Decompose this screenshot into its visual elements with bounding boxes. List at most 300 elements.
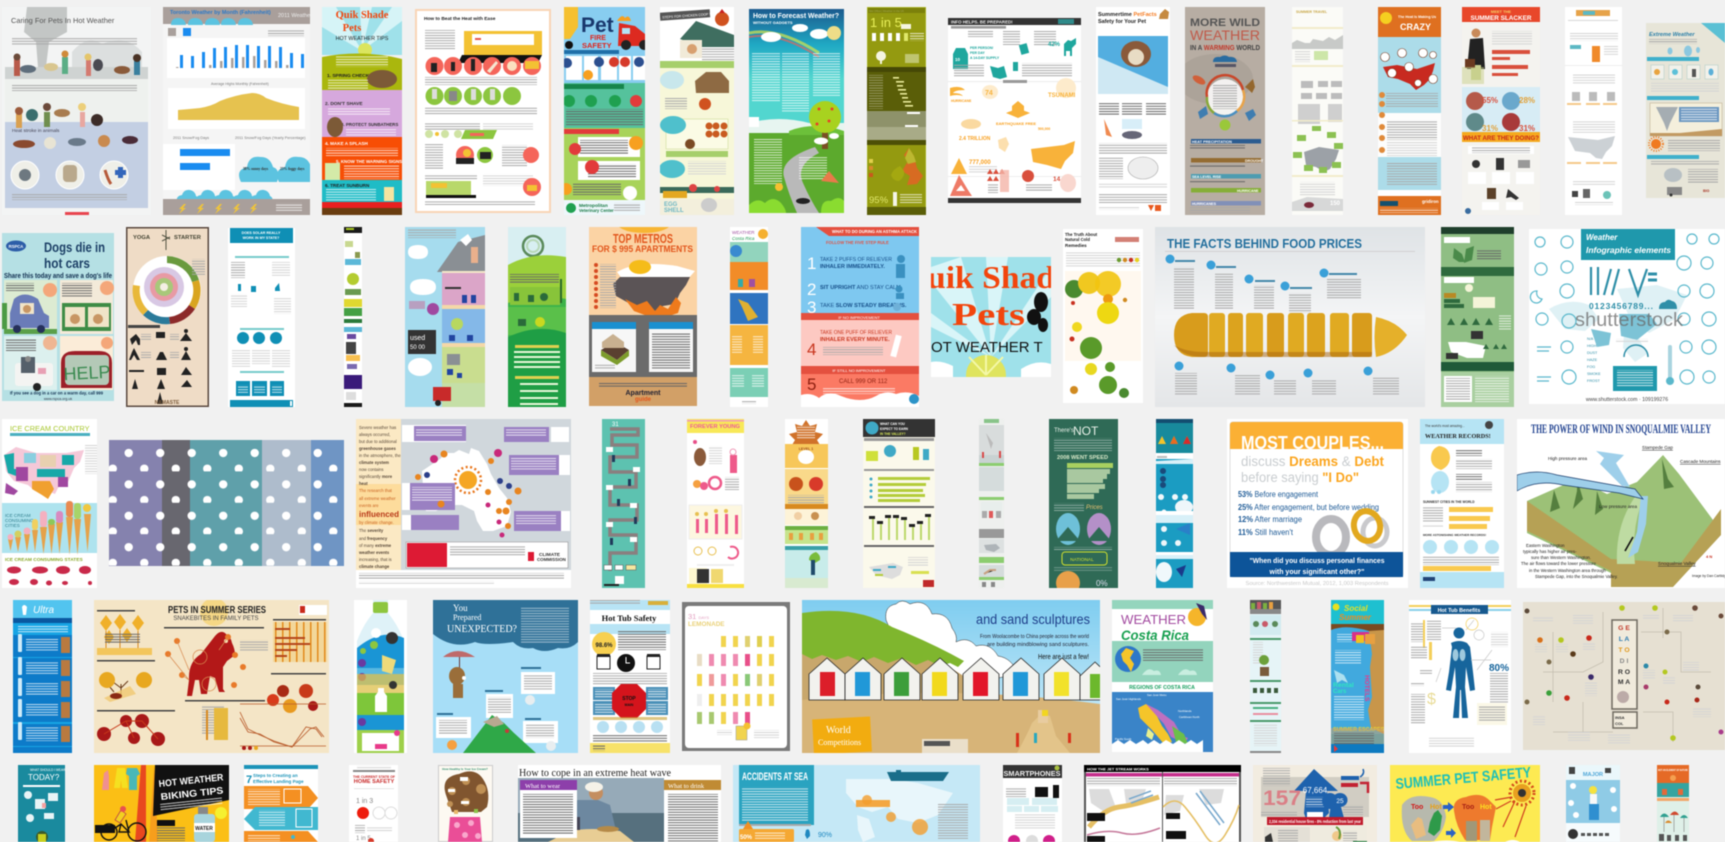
sun xyxy=(1510,781,1534,805)
central title panel xyxy=(1612,620,1637,709)
tile: Toronto Weather by Month: Average Highs Monthly (Fahrenheit) xyxy=(211,82,269,86)
title box xyxy=(1431,605,1488,614)
central title panel: G E xyxy=(1618,625,1630,632)
title: The Truth About xyxy=(1065,232,1098,237)
tile: Ice Cream Country xyxy=(2,419,98,588)
title: Summertime PetFacts xyxy=(1098,12,1157,18)
tile: How to Beat the Heat with Ease xyxy=(414,8,552,214)
title: How Healthy Is Your Ice Cream? xyxy=(442,767,488,771)
tile: Asthma attack five step rule: CALL 999 OR 112 xyxy=(839,379,888,385)
gelato icons xyxy=(1524,605,1724,741)
yellow sign: World xyxy=(826,725,851,736)
tile: Home Safety: HOME SAFETY xyxy=(354,779,394,785)
word list: N/A xyxy=(1587,337,1594,341)
tile: polka dot colour stripes xyxy=(108,439,345,567)
text column: influenced xyxy=(359,510,399,519)
tile: The Power of Wind in Snoqualmie Valley: 4 N xyxy=(1706,554,1712,559)
title: Toronto Weather by Month (Fahrenheit) xyxy=(170,10,271,16)
labels: High pressure area xyxy=(1548,456,1588,461)
tile: Yoga Starter: STARTER xyxy=(174,235,202,241)
weather icons xyxy=(1530,234,1719,384)
title: WEATHER xyxy=(1121,612,1186,627)
tile: dark green chalkboard xyxy=(1048,418,1119,589)
tile: Quik Shade Pets hot weather tips: 5. KNOW THE WARNING SIGNS xyxy=(336,159,402,164)
title: MEET THE xyxy=(1491,9,1511,14)
tile: Summer Travel: 150 xyxy=(1330,201,1341,207)
green hill xyxy=(802,611,964,667)
central title panel: D I xyxy=(1620,658,1628,665)
1 in 5 figure xyxy=(870,15,924,41)
tile: Quik Shade Pets hot weather tips: Pets xyxy=(343,23,361,34)
tile: Toronto Weather by Month: 2011 Snow/Fog Days xyxy=(173,136,209,140)
right globe chart xyxy=(1163,789,1239,842)
tile: white with pink and yellow stats xyxy=(686,418,745,589)
woman in suit xyxy=(1465,28,1485,80)
title: Prepared xyxy=(453,613,481,622)
tile: Weather Infographic elements (shutterstock) xyxy=(1529,228,1725,404)
tile: Natural Cold Remedies: Natural Cold xyxy=(1065,237,1090,242)
word list: HIGH xyxy=(1587,344,1597,348)
title: YOGA xyxy=(133,235,151,241)
hanging clothes xyxy=(102,768,140,790)
tile: teal road game xyxy=(601,418,646,589)
orange hazards section: 74 xyxy=(985,90,993,97)
three blue boxes xyxy=(236,381,284,396)
tile: Weather Records: WEATHER RECORDS! xyxy=(1425,433,1491,440)
tile: Info helps be prepared xyxy=(947,17,1082,204)
tile: sun top health stats: LEVEL 1 xyxy=(799,447,813,451)
footer word: NAMASTE xyxy=(155,400,180,406)
tile: Dogs die in hot cars: www.rspca.org.uk xyxy=(44,397,72,401)
tile: Top Metros for Apartments: guide xyxy=(635,397,652,403)
icon: sun xyxy=(1649,137,1663,151)
tile: Are You Prepared for the Unexpected xyxy=(433,600,578,753)
tile: Weather Records xyxy=(1420,419,1504,588)
teal preparedness section: A 14-DAY SUPPLY xyxy=(970,56,1000,60)
orange stat box xyxy=(739,821,794,842)
teal arrow step xyxy=(244,807,318,830)
stop octagon xyxy=(612,684,646,718)
navy callout: with your significant other?" xyxy=(1269,567,1365,576)
human body figure xyxy=(1446,628,1475,718)
area chart xyxy=(168,88,305,129)
tile: How to Forecast Weather: WITHOUT GADGETS xyxy=(753,20,793,25)
teal preparedness section: 42% xyxy=(1048,42,1061,48)
tile: More Wild Weather in a Warming World: IN A WARMING WORLD xyxy=(1190,43,1260,52)
icon: black paw xyxy=(1027,292,1048,332)
orange circles xyxy=(267,684,318,713)
steps: TAKE SLOW STEADY BREATHS. xyxy=(820,303,907,309)
orange hazards section xyxy=(950,78,1076,174)
tile: Hot Tub Benefits xyxy=(1409,600,1511,753)
sea photo xyxy=(518,778,664,842)
tile: Extreme Weather xyxy=(1646,22,1725,198)
explanation text: sure than Western Washington. xyxy=(1531,555,1591,560)
panel: too hot gray: Hot xyxy=(1430,804,1442,811)
watermark: shutterstock xyxy=(1575,310,1684,331)
statistic circles: 55% xyxy=(1482,96,1498,105)
steps xyxy=(807,254,907,317)
tile: Accidents at Sea xyxy=(733,765,980,842)
US map with icons xyxy=(1380,48,1438,90)
red callout xyxy=(406,542,568,568)
text column: events are xyxy=(359,503,379,508)
explanation text: typically has higher air pres- xyxy=(1523,549,1577,554)
tile: Asthma attack five step rule: IF NO IMPROVEMENT xyxy=(838,315,880,320)
tile: 7 Steps to Creating an Effective Landing Page: Steps to Creating an xyxy=(253,773,298,778)
tile: Ice Cream Country: CONSUMING xyxy=(5,518,34,523)
footer credit: www.shutterstock.com · 109199276 xyxy=(1586,397,1668,403)
steps: 3 xyxy=(807,298,816,317)
diamond signs xyxy=(100,614,144,644)
text column: all extreme weather xyxy=(359,496,396,501)
tree diagram xyxy=(99,672,152,702)
terrain block xyxy=(1527,455,1721,587)
teal preparedness section xyxy=(953,30,1076,79)
tile: Dogs die in hot cars: hot cars xyxy=(44,255,90,271)
logo: Apartment xyxy=(625,390,661,397)
title: HOT WEATHER xyxy=(158,772,224,790)
title: Social xyxy=(1344,604,1368,613)
text column: The severity xyxy=(359,528,384,533)
teal preparedness section: PER DAY xyxy=(970,51,985,55)
tile: What can you expect dark header xyxy=(862,418,936,588)
tile: Weather Costa Rica: Northlands xyxy=(1178,709,1192,713)
panel: too hot gray: Too xyxy=(1411,804,1423,811)
purple callouts xyxy=(402,425,570,531)
tornado scene xyxy=(1650,103,1722,136)
sunniest bars xyxy=(1423,506,1493,529)
numerals: 0123456789... xyxy=(1589,301,1654,311)
tile: Quik Shade Pets crop xyxy=(927,256,1055,378)
tile: light blue multi panel: 50 00 xyxy=(410,345,426,351)
central title panel: T O xyxy=(1618,647,1630,654)
tile: Social Summer: SUMMER ESCAPES xyxy=(1333,727,1385,733)
panel: house card xyxy=(592,322,636,372)
tile: sun top health stats xyxy=(784,419,829,588)
tile: More Wild Weather in a Warming World: HURRICANE xyxy=(1237,189,1259,193)
subtitle: OT WEATHER T xyxy=(931,339,1043,356)
explanation text: in the Western Washington area through xyxy=(1529,568,1607,573)
tile: 7 Steps to Creating an Effective Landing Page: Effective Landing Page xyxy=(253,779,304,784)
tile: Toronto Weather by Month: 2011 Weather xyxy=(278,13,312,19)
tile: Asthma attack five step rule xyxy=(800,226,920,407)
orange header: MOST COUPLES... xyxy=(1241,433,1384,453)
central title panel: R O xyxy=(1618,669,1630,676)
dark storm cloud xyxy=(433,600,578,651)
white clouds xyxy=(886,601,1018,694)
title: HOW THE JET STREAM WORKS xyxy=(1087,766,1149,772)
tile: chicken coop guide xyxy=(659,7,735,215)
heading: WHAT ARE THEY DOING? xyxy=(1463,136,1539,142)
heading: REGIONS OF COSTA RICA xyxy=(1129,685,1195,691)
title box xyxy=(1581,229,1675,260)
cyclist xyxy=(101,820,146,841)
text column: climate system xyxy=(359,460,389,465)
text column: significantly more xyxy=(359,474,393,479)
title: SUMMER TRAVEL xyxy=(1296,10,1328,14)
world map xyxy=(846,779,953,842)
explanation text xyxy=(1521,543,1618,579)
cloud: sunny days: 38% sunny days xyxy=(243,167,269,171)
labels: Snoqualmie Valley xyxy=(1658,561,1696,566)
horizontal bars xyxy=(180,149,230,170)
tile: Pet Fire Safety: FIRE xyxy=(590,35,606,42)
tile: Smartphones xyxy=(1003,765,1062,842)
water bottle: WATER xyxy=(195,826,213,832)
cloud: sunny days xyxy=(239,157,278,182)
badge xyxy=(1188,603,1207,626)
statistics list: 11% Still haven't xyxy=(1238,528,1294,537)
title xyxy=(447,603,517,635)
thermometer panel xyxy=(458,31,542,63)
yellow sign: Competitions xyxy=(818,738,861,747)
large lemonade cup xyxy=(736,722,750,740)
orange hazards section: 777,000 xyxy=(969,160,991,166)
tile: Quik Shade Pets hot weather tips: 3. PROTECT SUNBATHERS xyxy=(341,122,398,127)
orange arrow step xyxy=(244,786,318,809)
heading: ICE CREAM CONSUMING STATES xyxy=(5,557,83,563)
ranking list xyxy=(594,263,598,309)
tan hillside xyxy=(802,640,992,700)
beach huts xyxy=(809,658,1110,700)
panel: too hot orange xyxy=(1454,795,1496,841)
title: ICE CREAM COUNTRY xyxy=(10,424,90,433)
title: Caring For Pets In Hot Weather xyxy=(11,16,115,25)
bar chart xyxy=(167,38,305,78)
text column: Severe weather has xyxy=(359,425,396,430)
tile: More Wild Weather in a Warming World: HURRICANES xyxy=(1192,202,1217,206)
wind arrow xyxy=(1517,472,1643,499)
tile: Hot Tub Benefits: $ xyxy=(1427,691,1436,708)
yoga poses xyxy=(129,329,192,404)
big number: 157 xyxy=(1263,787,1301,810)
tile: More Wild Weather in a Warming World: SEA LEVEL RISE xyxy=(1192,175,1222,179)
word list: DUST xyxy=(1587,351,1598,355)
panel: tips card xyxy=(649,322,693,372)
title: Ultra xyxy=(33,605,55,616)
text column: climate change xyxy=(359,564,390,569)
tile: Hot Weather Biking Tips xyxy=(94,765,229,842)
title: 7 xyxy=(246,774,252,786)
word list: FROST xyxy=(1587,379,1601,383)
tile: How the Jet Stream Works xyxy=(1084,765,1241,842)
title box: Weather xyxy=(1586,233,1618,242)
tile: Quik Shade Pets hot weather tips: 4. MAKE A SPLASH xyxy=(325,141,368,146)
tile: Does solar really work in my state xyxy=(228,227,295,408)
text column: but due to additional xyxy=(359,439,397,444)
text column: heat xyxy=(359,481,368,486)
sun xyxy=(966,355,1006,395)
tile: Weather Costa Rica long xyxy=(729,227,769,407)
orange hazards section: 2.4 TRILLION xyxy=(959,136,991,142)
title: SMARTPHONES xyxy=(1004,769,1061,778)
tile: Weather Costa Rica: San José Metro xyxy=(1147,693,1167,697)
title: Extreme Weather xyxy=(1649,32,1695,38)
tile: Accidents at Sea: 90% xyxy=(818,832,832,839)
panel: what to wear: What to wear xyxy=(525,783,561,790)
tile: Dogs die in hot cars xyxy=(1,232,115,402)
word list: HAZE xyxy=(1587,358,1598,362)
wedding rings xyxy=(1316,508,1387,555)
horizontal bar chart xyxy=(273,622,327,662)
statistic circles xyxy=(1466,92,1535,133)
ship xyxy=(887,770,949,781)
text column: increasing, that is xyxy=(359,557,392,562)
title: THE FACTS BEHIND FOOD PRICES xyxy=(1167,236,1362,251)
explanation text: The air flows toward the lower pressure xyxy=(1521,561,1597,566)
panel: mountain xyxy=(437,234,485,272)
title: How to Forecast Weather? xyxy=(753,11,839,20)
title: The world's most amazing... xyxy=(1425,424,1465,428)
tile: dark green chalkboard: 0% xyxy=(1096,579,1108,588)
tile: Pet Fire Safety xyxy=(563,6,646,214)
title box: Infographic elements xyxy=(1586,246,1672,255)
tile: Summer Pet Safety xyxy=(1390,764,1540,842)
panel: too hot gray xyxy=(1402,796,1446,841)
labels xyxy=(1548,445,1725,578)
text columns lower xyxy=(1174,362,1399,396)
text column: in the atmosphere, the xyxy=(359,453,401,458)
tile: More Wild Weather in a Warming World: WEATHER xyxy=(1190,28,1260,43)
tag labels xyxy=(1341,769,1368,793)
tile: blue teal safety xyxy=(1155,418,1194,589)
labels: Stampede Gap xyxy=(1642,445,1673,450)
tile: More Wild Weather in a Warming World xyxy=(1184,6,1266,216)
tile: bottle shaped infographic xyxy=(354,600,407,753)
tile: Gelato di Roma: INSA xyxy=(1615,715,1625,720)
steps: SIT UPRIGHT AND STAY CALM. xyxy=(820,285,903,291)
tile: Caring For Pets In Hot Weather xyxy=(4,6,148,216)
fire truck xyxy=(617,16,649,50)
tile: narrow strip infographic xyxy=(343,226,363,408)
tile: Major Life skills light blue xyxy=(1566,765,1620,842)
text column: greenhouse gases xyxy=(359,446,396,451)
RSPCA logo: RSPCA xyxy=(9,244,23,249)
orange header xyxy=(1230,422,1403,453)
panel: what to drink xyxy=(664,780,721,842)
fried egg US map xyxy=(613,260,695,317)
tile: What can you expect dark header: EXPECT TO EARN xyxy=(880,427,909,431)
text column: always occurred, xyxy=(359,432,390,437)
tile: Weather Records: MORE ASTONISHING WEATHER RECORDS! xyxy=(1423,533,1486,537)
title: WHAT SHOULD I WEAR xyxy=(30,768,66,772)
tile: The Power of Wind in Snoqualmie Valley xyxy=(1517,419,1725,588)
tile: thin plant infographic xyxy=(1250,600,1281,753)
tile: More Wild Weather in a Warming World: HEAT PRECIPITATION xyxy=(1192,140,1232,144)
heading: ICE CREAM xyxy=(5,513,31,518)
tile: chicken coop guide: SHELL xyxy=(664,208,684,214)
US map xyxy=(4,447,84,499)
source: Source: Northwestern Mutual, 2012, 1,003 Respondents xyxy=(1246,581,1389,587)
tile: Weather Costa Rica long: Costa Rica xyxy=(732,236,755,241)
text columns upper xyxy=(1166,254,1361,313)
labels: Cascade Mountains xyxy=(1680,459,1721,464)
tile: beach huts and sand sculptures xyxy=(802,600,1110,754)
panel: blue car xyxy=(2,280,57,334)
tile: Home Safety xyxy=(349,765,398,842)
footer text: If you see a dog in a car on a warm day, call 999 xyxy=(10,390,103,396)
yellow statistic: 98.6% xyxy=(595,643,613,649)
tile: More Wild Weather in a Warming World: DROUGHT xyxy=(1245,159,1264,163)
tile: How to Forecast Weather xyxy=(748,8,845,214)
tile: Ice Cream Country: CITIES xyxy=(5,523,20,528)
tile: Weather Records: SUNNIEST CITIES IN THE WORLD xyxy=(1423,500,1475,504)
title: Pet xyxy=(581,14,614,37)
vertical flag chart xyxy=(872,516,930,540)
tile: beach huts and sand sculptures: are building mindblowing sand sculptures. xyxy=(987,642,1089,648)
central title panel: L A xyxy=(1619,636,1629,643)
tile: Weather Costa Rica: Caribbean North xyxy=(1179,715,1200,719)
text column: The research that xyxy=(359,488,393,493)
left globe chart xyxy=(1087,789,1160,842)
tree xyxy=(809,101,841,149)
text column: and frequency xyxy=(359,536,388,541)
tile: Quik Shade Pets hot weather tips: 1. SPRING CHECK UP xyxy=(327,73,378,79)
tile: Asthma attack five step rule: 5 xyxy=(807,375,816,394)
panel: HELP window xyxy=(60,336,113,390)
tile: Summer Travel xyxy=(1292,8,1344,214)
statistics list: 12% After marriage xyxy=(1238,515,1303,524)
white cards xyxy=(436,672,558,743)
cup grid xyxy=(697,636,774,724)
tile: Natural Cold Remedies: Remedies xyxy=(1065,243,1087,248)
globe xyxy=(1115,646,1141,672)
statistic circles: 31% xyxy=(1482,124,1498,133)
tile: dark green chalkboard: NATIONAL xyxy=(1070,557,1094,563)
tile: Today teal infographic xyxy=(18,765,66,842)
US map xyxy=(1568,136,1615,159)
pony with umbrella xyxy=(443,651,475,698)
arrows xyxy=(1443,802,1456,838)
tile: Meet the Summer Slacker: SUMMER SLACKER xyxy=(1470,15,1532,22)
teal preparedness section: PER PERSON/ xyxy=(970,46,993,50)
tile: Gelato di Roma xyxy=(1523,602,1725,750)
red wildfire section: 14 xyxy=(1053,176,1061,183)
tile: Gelato di Roma: COL xyxy=(1615,721,1624,726)
tile: Meet the Summer Slacker xyxy=(1461,6,1541,215)
tile: Summertime Pet Safety xyxy=(1096,7,1170,215)
tile: climate change extreme weather Australia xyxy=(356,418,572,588)
teal preparedness section: 10 xyxy=(955,57,961,62)
stop octagon: MAIN xyxy=(625,703,634,707)
title: UNEXPECTED? xyxy=(447,624,517,635)
navy callout: "When did you discuss personal finances xyxy=(1250,556,1384,565)
tile: beach huts and sand sculptures: Here are just a few! xyxy=(1038,654,1089,661)
panel: too hot orange: Hot xyxy=(1480,804,1492,811)
title: DOES SOLAR REALLY xyxy=(242,231,281,235)
blue arrow stat: 67,664 xyxy=(1303,786,1328,795)
statistics list: 53% Before engagement xyxy=(1238,490,1319,499)
tile: Ultra bottles xyxy=(13,600,72,753)
word list xyxy=(1587,337,1601,383)
connector lines xyxy=(1543,608,1711,742)
Australia map xyxy=(422,448,511,531)
heading: Met Office | Weather in the UK xyxy=(869,9,904,13)
tile: Asthma attack five step rule: FOLLOW THE FIVE STEP RULE xyxy=(826,240,889,245)
heading: heat stroke in animals: Heat stroke in animals xyxy=(12,128,60,134)
tile: Asthma attack five step rule: TAKE ONE PUFF OF RELIEVER xyxy=(820,330,892,336)
word list: FOG xyxy=(1587,365,1595,369)
callout nodes xyxy=(165,634,246,688)
title: INFO HELPS. BE PREPARED! xyxy=(951,19,1013,24)
tile: Weather Costa Rica: Pacific South xyxy=(1115,737,1132,741)
subtitle: From Woolacombe to China people across the world xyxy=(980,634,1089,640)
tile: Social Summer: Cars xyxy=(1333,689,1347,695)
tile: How to cope in an extreme heat wave xyxy=(518,765,721,842)
title: The Heat Is Making Us xyxy=(1398,15,1436,19)
steps: 1 xyxy=(807,254,816,273)
